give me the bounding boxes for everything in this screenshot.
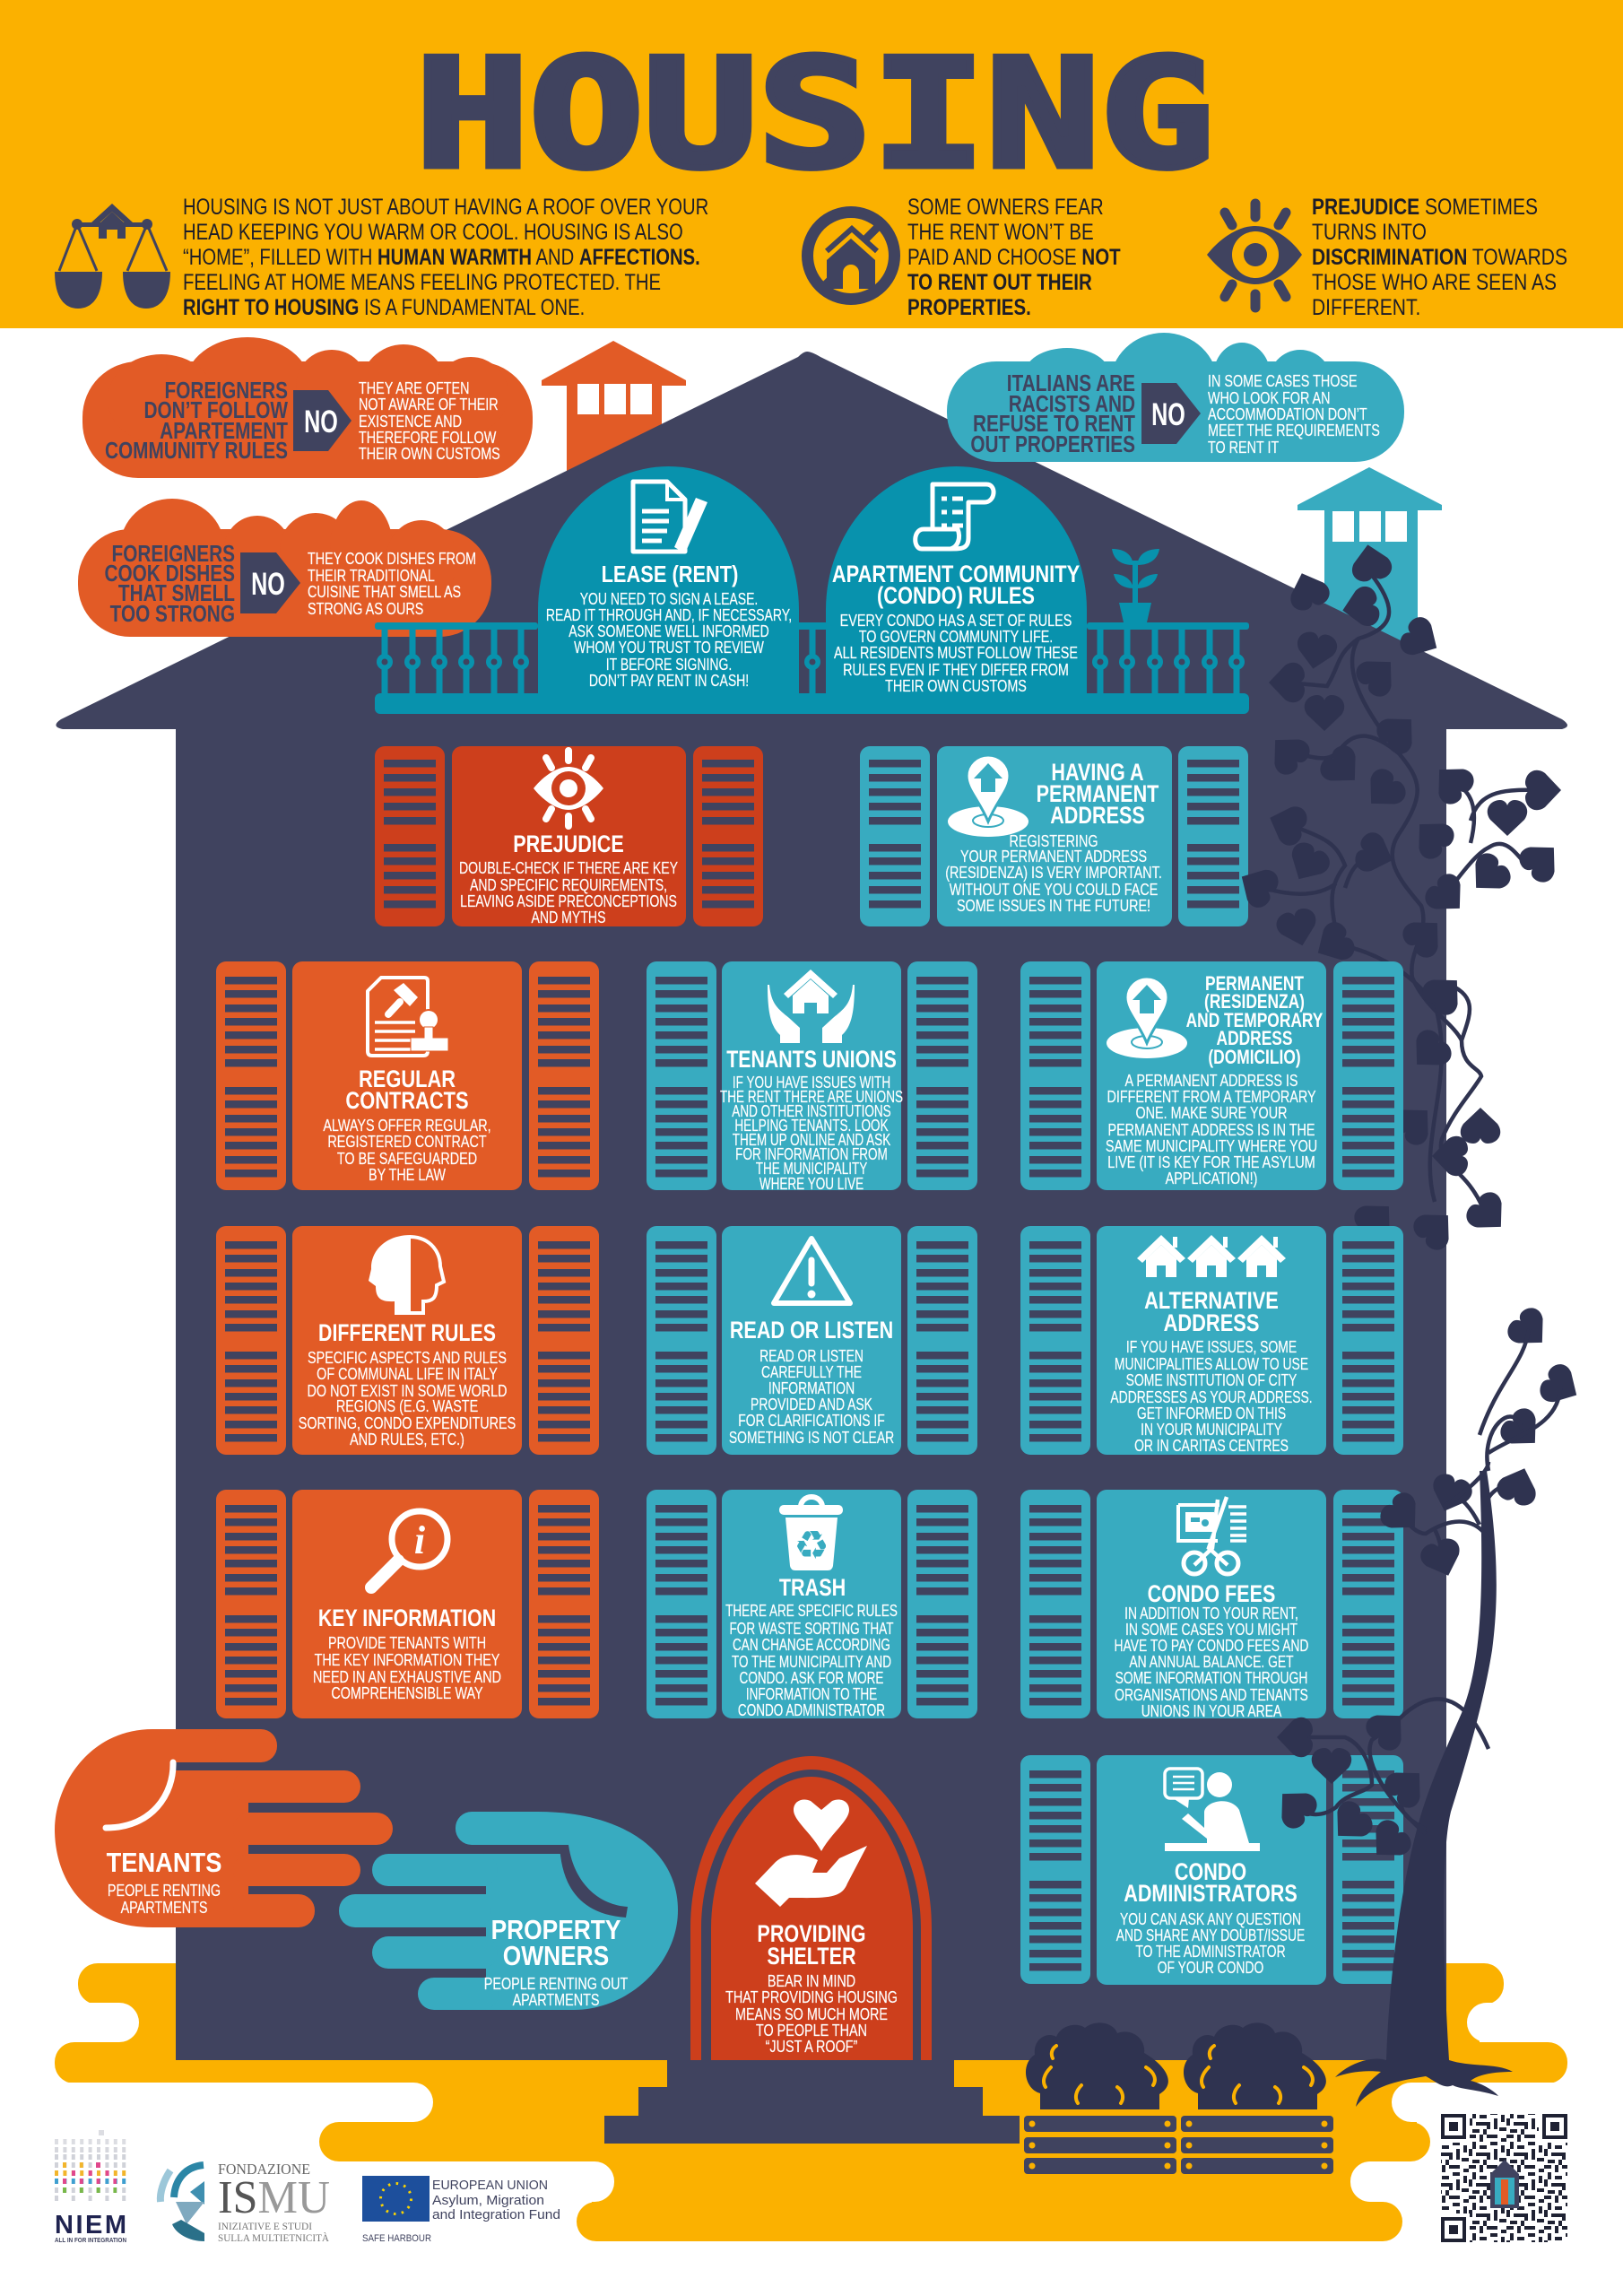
text: IN YOUR MUNICIPALITY bbox=[1141, 1420, 1282, 1439]
heading: PREJUDICE bbox=[513, 831, 624, 858]
text: CAREFULLY THE bbox=[761, 1362, 862, 1382]
text: UNIONS IN YOUR AREA bbox=[1141, 1701, 1281, 1721]
text: COMPREHENSIBLE WAY bbox=[331, 1683, 483, 1702]
answer text: MEET THE REQUIREMENTS bbox=[1208, 421, 1380, 439]
door: providing shelter bbox=[690, 1756, 932, 2060]
text: SORTING, CONDO EXPENDITURES bbox=[299, 1413, 516, 1432]
bubble: italians racists bbox=[947, 333, 1404, 462]
heading bbox=[1144, 1288, 1279, 1337]
window: trash bbox=[647, 1490, 977, 1720]
text: LEAVING ASIDE PRECONCEPTIONS bbox=[460, 891, 677, 911]
text: DOUBLE-CHECK IF THERE ARE KEY bbox=[459, 858, 678, 878]
heading bbox=[1037, 760, 1159, 830]
text: IF YOU HAVE ISSUES, SOME bbox=[1126, 1337, 1297, 1357]
heading: REGULAR bbox=[359, 1066, 456, 1093]
claim text: OUT PROPERTIES bbox=[970, 431, 1135, 457]
logo: ISMU: SULLA MULTIETNICITÀ bbox=[218, 2231, 329, 2244]
lease text: IT BEFORE SIGNING. bbox=[606, 655, 732, 674]
text: PROVIDE TENANTS WITH bbox=[328, 1633, 486, 1652]
condo text: RULES EVEN IF THEY DIFFER FROM bbox=[843, 660, 1069, 679]
text: FOR WASTE SORTING THAT bbox=[730, 1620, 893, 1639]
text: MUNICIPALITIES ALLOW TO USE bbox=[1115, 1354, 1308, 1374]
heading: TENANTS UNIONS bbox=[726, 1047, 897, 1074]
claim text: RACISTS AND bbox=[1009, 391, 1135, 417]
answer text: THEY ARE OFTEN bbox=[359, 378, 469, 397]
text: BEAR IN MIND bbox=[768, 1971, 855, 1990]
header band bbox=[0, 0, 1623, 328]
logo: NIEM: NIEM bbox=[55, 2211, 126, 2239]
text: SAME MUNICIPALITY WHERE YOU bbox=[1106, 1136, 1317, 1155]
heading: KEY INFORMATION bbox=[318, 1605, 496, 1632]
heading: AND TEMPORARY bbox=[1186, 1010, 1323, 1032]
window: tenants unions bbox=[647, 961, 977, 1194]
text: REGISTERED CONTRACT bbox=[327, 1132, 487, 1151]
text bbox=[323, 1116, 491, 1184]
hand: tenants bbox=[55, 1729, 393, 1927]
lease text: YOU NEED TO SIGN A LEASE. bbox=[580, 589, 758, 609]
heading: HAVING A bbox=[1051, 760, 1144, 787]
icon: administrator at desk bbox=[1165, 1769, 1260, 1851]
text: TO PEOPLE THAN bbox=[756, 2021, 867, 2039]
tenants label: PEOPLE RENTING bbox=[108, 1881, 221, 1900]
text bbox=[459, 858, 678, 927]
condo heading: APARTMENT COMMUNITY bbox=[832, 561, 1080, 588]
logo: European Union: and Integration Fund bbox=[432, 2207, 560, 2222]
lease text: READ IT THROUGH AND, IF NECESSARY, bbox=[546, 605, 792, 625]
icon: eye bbox=[534, 751, 603, 826]
owners label: PROPERTY bbox=[491, 1915, 621, 1946]
intro text: housing bbox=[183, 194, 708, 319]
text: INFORMATION bbox=[768, 1378, 855, 1398]
intro text: prejudice bbox=[1312, 194, 1567, 319]
panel: lease arch bbox=[538, 466, 799, 693]
text: FOR INFORMATION FROM bbox=[735, 1145, 888, 1164]
text: BY THE LAW bbox=[369, 1165, 446, 1184]
heading: CONDO bbox=[1175, 1859, 1246, 1886]
tenants label bbox=[107, 1848, 221, 1917]
text: INFORMATION TO THE bbox=[746, 1685, 877, 1704]
text: A PERMANENT ADDRESS IS bbox=[1125, 1071, 1298, 1090]
chimney: teal bbox=[1298, 467, 1442, 655]
condo heading: (CONDO) RULES bbox=[877, 583, 1035, 610]
condo text: EVERY CONDO HAS A SET OF RULES bbox=[840, 611, 1072, 630]
heading: PROVIDING bbox=[757, 1921, 866, 1948]
logo: ISMU: ISMU bbox=[218, 2172, 330, 2223]
window: read or listen bbox=[647, 1226, 977, 1455]
icon: potted plant bbox=[1112, 549, 1159, 622]
text: TO THE MUNICIPALITY AND bbox=[732, 1653, 891, 1672]
answer text: THEIR TRADITIONAL bbox=[308, 566, 435, 585]
text: DO NOT EXIST IN SOME WORLD bbox=[308, 1381, 507, 1400]
text: CAN CHANGE ACCORDING bbox=[733, 1636, 890, 1655]
text: MEANS SO MUCH MORE bbox=[735, 2005, 888, 2023]
owners label: APARTMENTS bbox=[513, 1990, 599, 2009]
intro text: prejudice: PREJUDICE SOMETIMES bbox=[1312, 194, 1538, 219]
claim text: COMMUNITY RULES bbox=[105, 438, 288, 464]
text: AND SHARE ANY DOUBT/ISSUE bbox=[1116, 1926, 1305, 1945]
text bbox=[1116, 1909, 1305, 1978]
heading: DIFFERENT RULES bbox=[318, 1320, 496, 1347]
text bbox=[725, 1971, 898, 2056]
condo heading bbox=[832, 561, 1080, 610]
arrow NO: NO bbox=[251, 567, 285, 602]
window: different rules bbox=[216, 1226, 599, 1455]
answer text: THEIR OWN CUSTOMS bbox=[359, 444, 500, 463]
text: IN SOME CASES YOU MIGHT bbox=[1125, 1620, 1298, 1639]
text: ORGANISATIONS AND TENANTS bbox=[1115, 1685, 1308, 1705]
owners label: OWNERS bbox=[503, 1941, 609, 1972]
text: APPLICATION!) bbox=[1166, 1169, 1257, 1187]
text: AND OTHER INSTITUTIONS bbox=[732, 1102, 891, 1121]
text: YOUR PERMANENT ADDRESS bbox=[960, 847, 1147, 865]
heading bbox=[757, 1921, 866, 1970]
house body bbox=[56, 352, 1567, 2060]
text: OR IN CARITAS CENTRES bbox=[1134, 1436, 1289, 1456]
condo text: THEIR OWN CUSTOMS bbox=[885, 676, 1027, 695]
icon: magnifier with i: i bbox=[414, 1518, 426, 1562]
hand: property owners bbox=[339, 1812, 678, 2010]
window: condo administrators bbox=[1020, 1755, 1403, 1985]
heading: READ OR LISTEN bbox=[730, 1318, 893, 1344]
text: THERE ARE SPECIFIC RULES bbox=[725, 1602, 898, 1621]
heading: (DOMICILIO) bbox=[1208, 1047, 1301, 1069]
heading: CONTRACTS bbox=[345, 1088, 469, 1115]
text: AND RULES, ETC.) bbox=[350, 1430, 464, 1448]
icon: hands holding house bbox=[768, 970, 855, 1043]
claim text: FOREIGNERS bbox=[112, 541, 235, 567]
heading bbox=[345, 1066, 469, 1115]
text: CONDO. ASK FOR MORE bbox=[740, 1669, 884, 1688]
lease text bbox=[546, 589, 792, 691]
text: THE KEY INFORMATION THEY bbox=[315, 1650, 499, 1669]
text: YOU CAN ASK ANY QUESTION bbox=[1120, 1909, 1301, 1929]
heading: PERMANENT bbox=[1205, 973, 1304, 996]
tenants label: APARTMENTS bbox=[121, 1898, 207, 1917]
heading: ADDRESS bbox=[1050, 803, 1145, 830]
claim text bbox=[970, 370, 1136, 457]
window: permanent and temporary address bbox=[1020, 961, 1403, 1190]
icon: scroll checklist bbox=[916, 484, 994, 549]
text: LIVE (IT IS KEY FOR THE ASYLUM bbox=[1107, 1152, 1315, 1171]
text: AND MYTHS bbox=[531, 908, 606, 927]
arrow NO bbox=[293, 390, 352, 451]
vine on house bbox=[1258, 541, 1568, 1255]
text bbox=[1110, 1337, 1313, 1456]
logo: European Union bbox=[362, 2176, 560, 2244]
heading: CONDO FEES bbox=[1148, 1581, 1275, 1608]
window: key information bbox=[216, 1490, 599, 1718]
text: SOME INSTITUTION OF CITY bbox=[1126, 1370, 1297, 1390]
icon: document and pen bbox=[633, 482, 707, 553]
text: THE RENT THERE ARE UNIONS bbox=[720, 1088, 903, 1107]
lease text: DON’T PAY RENT IN CASH! bbox=[589, 671, 749, 691]
heading: TRASH bbox=[779, 1575, 846, 1602]
claim text: DON’T FOLLOW bbox=[143, 397, 289, 423]
chimney: orange bbox=[542, 341, 686, 498]
window: regular contracts bbox=[216, 961, 599, 1190]
text bbox=[1106, 1071, 1317, 1187]
condo text bbox=[834, 611, 1078, 695]
intro text: prejudice: THOSE WHO ARE SEEN AS bbox=[1312, 269, 1557, 294]
text: HELPING TENANTS. LOOK bbox=[734, 1117, 889, 1135]
stairs bbox=[604, 2060, 1020, 2144]
intro text: owners bbox=[907, 194, 1121, 319]
owners label: PEOPLE RENTING OUT bbox=[484, 1974, 628, 1993]
intro text: prejudice: TURNS INTO bbox=[1312, 219, 1427, 244]
text: IF YOU HAVE ISSUES WITH bbox=[733, 1074, 890, 1092]
intro text: owners: TO RENT OUT THEIR bbox=[907, 269, 1092, 294]
answer text bbox=[1208, 371, 1380, 457]
arrow NO: NO bbox=[1151, 397, 1185, 432]
heading: ALTERNATIVE bbox=[1144, 1288, 1279, 1315]
logo: European Union: EUROPEAN UNION bbox=[432, 2178, 548, 2193]
text: OF YOUR CONDO bbox=[1158, 1958, 1263, 1978]
title: HOUSING bbox=[415, 28, 1214, 202]
answer text: EXISTENCE AND bbox=[359, 412, 462, 430]
logo: NIEM bbox=[55, 2133, 127, 2244]
intro text: owners: PAID AND CHOOSE NOT bbox=[907, 244, 1121, 269]
claim text: ITALIANS ARE bbox=[1007, 370, 1135, 396]
lease text: WHOM YOU TRUST TO REVIEW bbox=[574, 638, 764, 657]
text: PERMANENT ADDRESS IS IN THE bbox=[1108, 1120, 1315, 1139]
intro text: housing: RIGHT TO HOUSING IS A FUNDAMENTAL ONE. bbox=[183, 294, 585, 319]
claim text: REFUSE TO RENT bbox=[973, 411, 1136, 437]
logo: European Union: Asylum, Migration bbox=[432, 2193, 544, 2208]
text: OF COMMUNAL LIFE IN ITALY bbox=[317, 1364, 498, 1383]
heading: ADMINISTRATORS bbox=[1124, 1881, 1298, 1908]
icon: recycling bin: ♻ bbox=[794, 1523, 829, 1569]
text: NEED IN AN EXHAUSTIVE AND bbox=[313, 1667, 501, 1686]
icon: recycling bin bbox=[779, 1497, 843, 1570]
lease text: ASK SOMEONE WELL INFORMED bbox=[568, 622, 769, 641]
text: CONDO ADMINISTRATOR bbox=[738, 1701, 885, 1720]
arrow NO bbox=[240, 552, 300, 613]
condo text: TO GOVERN COMMUNITY LIFE. bbox=[859, 627, 1053, 646]
heading: PERMANENT bbox=[1037, 781, 1159, 808]
icon: scissors cutting money bbox=[1178, 1497, 1246, 1574]
logo: ISMU: FONDAZIONE bbox=[218, 2161, 310, 2178]
logo: ISMU: INIZIATIVE E STUDI bbox=[218, 2220, 312, 2232]
bubble: foreigners smell bbox=[78, 499, 491, 637]
answer text: IN SOME CASES THOSE bbox=[1208, 371, 1358, 390]
text bbox=[299, 1348, 516, 1448]
icon: map pin bbox=[948, 755, 1028, 837]
claim text bbox=[105, 378, 289, 464]
logo: European Union: SAFE HARBOUR bbox=[362, 2233, 431, 2244]
intro text: housing: HEAD KEEPING YOU WARM OR COOL. HOUSING IS ALSO bbox=[183, 219, 683, 244]
intro text: owners: PROPERTIES. bbox=[907, 294, 1031, 319]
text: SOME INFORMATION THROUGH bbox=[1115, 1668, 1307, 1688]
text: THE MUNICIPALITY bbox=[756, 1160, 867, 1178]
icon: three houses bbox=[1137, 1235, 1286, 1277]
icon: two-tone head bbox=[369, 1235, 444, 1315]
answer text: CUISINE THAT SMELL AS bbox=[308, 582, 461, 601]
intro text: prejudice: DISCRIMINATION TOWARDS bbox=[1312, 244, 1567, 269]
text: SPECIFIC ASPECTS AND RULES bbox=[308, 1348, 507, 1367]
text: AN ANNUAL BALANCE. GET bbox=[1129, 1652, 1294, 1672]
intro text: housing: HOUSING IS NOT JUST ABOUT HAVING A ROOF OVER YOUR bbox=[183, 194, 708, 219]
answer text: STRONG AS OURS bbox=[308, 599, 423, 618]
text: REGIONS (E.G. WASTE bbox=[336, 1396, 478, 1415]
answer text: NOT AWARE OF THEIR bbox=[359, 395, 499, 413]
answer text: THEREFORE FOLLOW bbox=[359, 428, 496, 447]
text: IN ADDITION TO YOUR RENT, bbox=[1124, 1604, 1298, 1623]
window: alternative address bbox=[1020, 1226, 1403, 1456]
text: DIFFERENT FROM A TEMPORARY bbox=[1107, 1087, 1316, 1106]
text: HAVE TO PAY CONDO FEES AND bbox=[1115, 1636, 1309, 1656]
ground: yellow steps bbox=[0, 1963, 1623, 2241]
answer text: THEY COOK DISHES FROM bbox=[308, 549, 476, 568]
claim text bbox=[104, 541, 235, 627]
icon: contract and stamp bbox=[368, 978, 448, 1056]
icon: scales with house bbox=[55, 204, 170, 309]
text bbox=[725, 1602, 898, 1720]
text: GET INFORMED ON THIS bbox=[1137, 1404, 1286, 1423]
icon: eye bbox=[1207, 204, 1302, 308]
answer text bbox=[359, 378, 500, 463]
intro text: housing: “HOME”, FILLED WITH HUMAN WARMTH AND AFFECTIONS. bbox=[183, 244, 700, 269]
text: THAT PROVIDING HOUSING bbox=[725, 1987, 898, 2006]
icon: map pin bbox=[1107, 977, 1187, 1058]
intro text: owners: THE RENT WON’T BE bbox=[907, 219, 1094, 244]
answer text: ACCOMMODATION DON’T bbox=[1208, 404, 1367, 423]
window: prejudice bbox=[375, 746, 763, 927]
text: ALWAYS OFFER REGULAR, bbox=[323, 1116, 491, 1135]
heading bbox=[1186, 973, 1323, 1069]
text: ONE. MAKE SURE YOUR bbox=[1136, 1103, 1287, 1122]
text: WITHOUT ONE YOU COULD FACE bbox=[950, 880, 1158, 899]
text: ADDRESSES AS YOUR ADDRESS. bbox=[1110, 1387, 1313, 1407]
window: permanent address bbox=[860, 746, 1248, 926]
heading: (RESIDENZA) bbox=[1204, 991, 1305, 1013]
heading: ADDRESS bbox=[1164, 1310, 1259, 1337]
logo: ISMU bbox=[161, 2161, 330, 2244]
claim text: THAT SMELL bbox=[118, 580, 235, 606]
answer text: WHO LOOK FOR AN bbox=[1208, 388, 1331, 407]
condo text: ALL RESIDENTS MUST FOLLOW THESE bbox=[834, 643, 1078, 662]
text: TO THE ADMINISTRATOR bbox=[1135, 1942, 1286, 1961]
text bbox=[720, 1074, 903, 1194]
text bbox=[313, 1633, 501, 1702]
arrow NO: NO bbox=[304, 404, 338, 439]
heading bbox=[1124, 1859, 1298, 1908]
QR code bbox=[1441, 2114, 1567, 2242]
heading: SHELTER bbox=[767, 1944, 856, 1970]
icon: magnifier with i bbox=[371, 1511, 447, 1587]
intro text: owners: SOME OWNERS FEAR bbox=[907, 194, 1104, 219]
text bbox=[1115, 1604, 1309, 1721]
text: FOR CLARIFICATIONS IF bbox=[738, 1411, 885, 1431]
text: TO BE SAFEGUARDED bbox=[337, 1149, 477, 1168]
intro text: housing: FEELING AT HOME MEANS FEELING PROTECTED. THE bbox=[183, 269, 661, 294]
balcony railing bbox=[375, 622, 1249, 714]
tenants label: TENANTS bbox=[107, 1848, 221, 1878]
icon: no house allowed bbox=[807, 212, 895, 300]
answer text bbox=[308, 549, 476, 618]
panel: condo rules arch bbox=[826, 466, 1087, 695]
heading: ADDRESS bbox=[1217, 1028, 1292, 1050]
icon: warning triangle bbox=[774, 1239, 850, 1303]
claim text: FOREIGNERS bbox=[165, 378, 288, 404]
text: THEM UP ONLINE AND ASK bbox=[733, 1131, 890, 1150]
owners label bbox=[484, 1915, 628, 2009]
text: PROVIDED AND ASK bbox=[751, 1395, 872, 1414]
text: SOME ISSUES IN THE FUTURE! bbox=[957, 896, 1150, 915]
bubble: foreigners rules bbox=[82, 337, 533, 478]
text: READ OR LISTEN bbox=[759, 1346, 864, 1366]
claim text: APARTEMENT bbox=[160, 418, 289, 444]
text bbox=[729, 1346, 894, 1448]
lease heading: LEASE (RENT) bbox=[602, 561, 738, 587]
claim text: COOK DISHES bbox=[104, 561, 235, 587]
tree with vine and hearts bbox=[1232, 859, 1586, 2107]
icon: heart in hand bbox=[755, 1799, 867, 1907]
text: “JUST A ROOF” bbox=[766, 2037, 857, 2056]
bushes in planters bbox=[1024, 2022, 1333, 2174]
text bbox=[945, 831, 1162, 915]
text: REGISTERING bbox=[1010, 831, 1098, 850]
text: AND SPECIFIC REQUIREMENTS, bbox=[470, 875, 667, 895]
intro text: prejudice: DIFFERENT. bbox=[1312, 294, 1420, 319]
text: WHERE YOU LIVE bbox=[759, 1175, 864, 1194]
text: SOMETHING IS NOT CLEAR bbox=[729, 1428, 894, 1448]
logo: NIEM: ALL IN FOR INTEGRATION bbox=[55, 2238, 126, 2244]
claim text: TOO STRONG bbox=[110, 601, 235, 627]
window: condo fees bbox=[1020, 1490, 1403, 1721]
arrow NO bbox=[1141, 383, 1201, 444]
text: (RESIDENZA) IS VERY IMPORTANT. bbox=[945, 863, 1162, 882]
answer text: TO RENT IT bbox=[1208, 438, 1279, 457]
